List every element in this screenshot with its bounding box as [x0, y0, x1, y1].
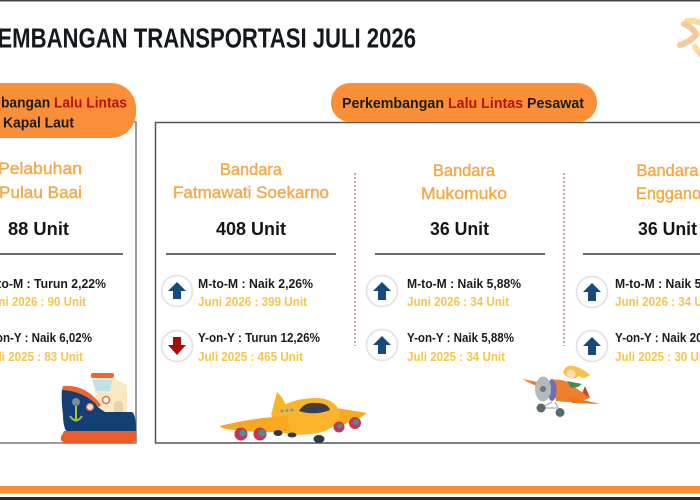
- icon: arrow up: [576, 330, 608, 362]
- icon: logo: [680, 21, 700, 54]
- icon: arrow up: [366, 330, 398, 360]
- icon: ship: [61, 373, 136, 443]
- divider: column 3 dotted: [563, 173, 565, 346]
- heading: sea traffic pill: Kapal Laut: [3, 116, 74, 132]
- icon: arrow down: [162, 330, 192, 362]
- column: Bandara Mukomuko: Y-on-Y : Naik 5,88%: [407, 331, 514, 345]
- column: Bandara Fatmawati Soekarno: Juni 2026 : 399 Unit: [198, 295, 308, 309]
- column: Bandara Mukomuko: M-to-M : Naik 5,88%: [407, 277, 521, 291]
- heading: air traffic pill: [331, 83, 597, 122]
- column: Bandara Fatmawati Soekarno: [162, 160, 336, 364]
- column: Bandara Enggano: 36 Unit: [638, 219, 697, 239]
- column: Pelabuhan Pulau Baai: [0, 159, 123, 364]
- column: Bandara Fatmawati Soekarno: Y-on-Y : Turun 12,26%: [198, 331, 320, 345]
- icon: arrow up: [162, 276, 192, 306]
- footer: orange bar: [0, 486, 700, 494]
- column: Bandara Fatmawati Soekarno: Bandara: [220, 160, 283, 179]
- column: Bandara Enggano: [576, 161, 700, 364]
- panel: sea traffic box: [0, 122, 136, 443]
- icon: yellow airplane: [220, 392, 367, 443]
- panel: air traffic box: [156, 122, 700, 443]
- icon: arrow up: [576, 276, 608, 308]
- column: Pelabuhan Pulau Baai: 88 Unit: [8, 219, 69, 239]
- column: Bandara Mukomuko: Bandara: [433, 161, 496, 180]
- column: Bandara Mukomuko: Juni 2026 : 34 Unit: [407, 295, 510, 309]
- divider: column 2 dotted: [354, 173, 356, 346]
- column: Bandara Mukomuko: Mukomuko: [421, 184, 507, 203]
- column: Bandara Enggano: Bandara: [636, 161, 699, 180]
- column: Bandara Mukomuko: 36 Unit: [430, 219, 489, 239]
- heading: air traffic pill: Perkembangan Lalu Lintas Pesawat: [342, 96, 584, 112]
- column: Bandara Fatmawati Soekarno: 408 Unit: [216, 219, 286, 239]
- icon: small plane with pilot: [522, 366, 600, 417]
- column: Bandara Fatmawati Soekarno: Juli 2025 : 465 Unit: [198, 350, 304, 364]
- column: Bandara Mukomuko: Juli 2025 : 34 Unit: [407, 350, 506, 364]
- column: Bandara Fatmawati Soekarno: Fatmawati Soekarno: [173, 183, 329, 202]
- icon: arrow up: [366, 276, 398, 306]
- column: Bandara Fatmawati Soekarno: M-to-M : Naik 2,26%: [198, 277, 313, 291]
- column: Pelabuhan Pulau Baai: Pelabuhan: [0, 159, 82, 178]
- heading: sea traffic pill: [0, 83, 136, 138]
- column: Bandara Mukomuko: [366, 161, 545, 364]
- column: Pelabuhan Pulau Baai: Pulau Baai: [0, 183, 82, 202]
